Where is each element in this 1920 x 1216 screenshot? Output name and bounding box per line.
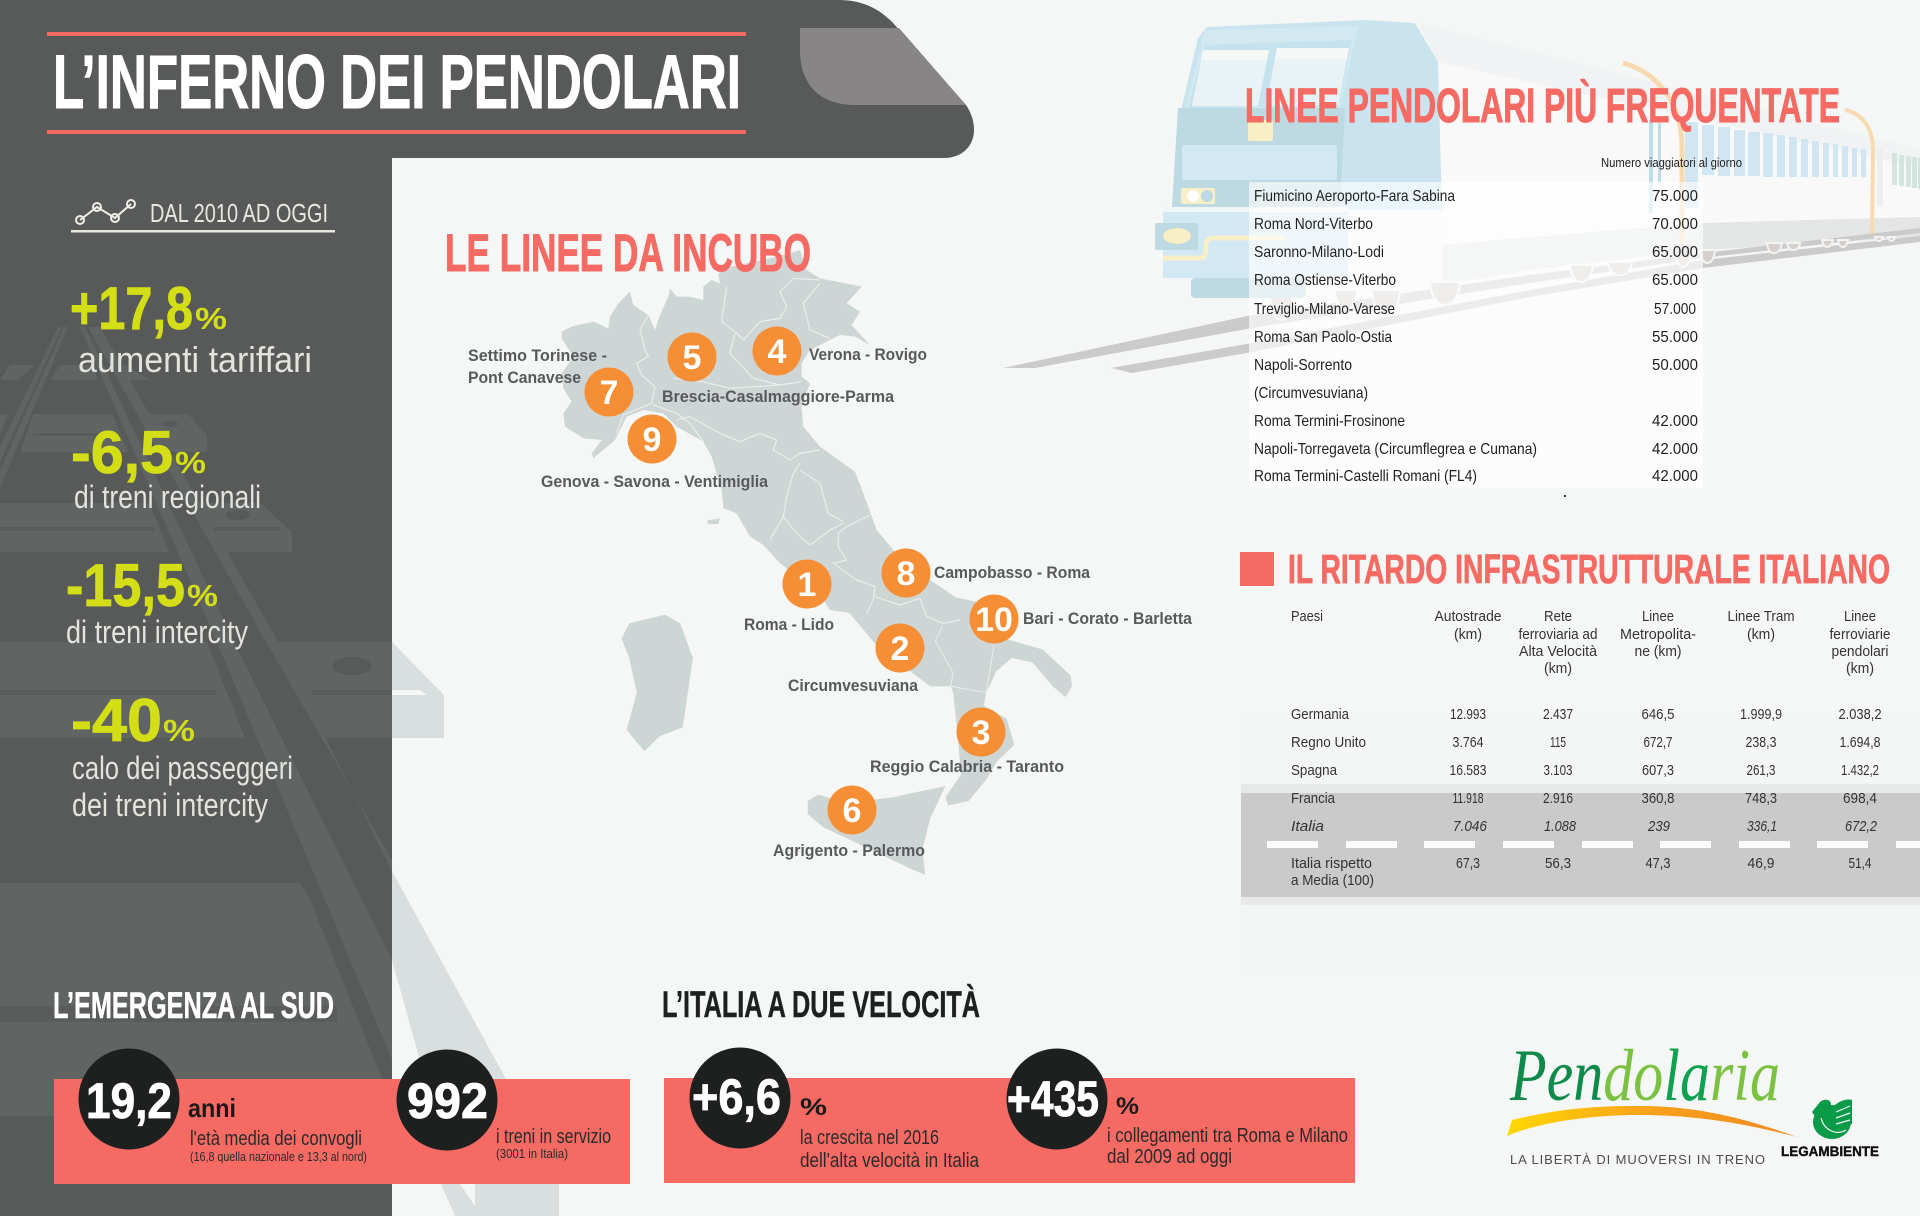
marker 4: Verona - Rovigo	[752, 326, 927, 376]
table: infrastructure comparison: 672,7	[1644, 734, 1672, 751]
table: infrastructure comparison: Linee Tram	[1728, 608, 1794, 625]
stat: treni regionali: -6,5	[71, 419, 173, 486]
table: infrastructure comparison: 261,3	[1746, 762, 1776, 779]
table: infrastructure comparison: 2.038,2	[1838, 706, 1882, 723]
stat: 992 treni: 992	[407, 1073, 488, 1129]
table: infrastructure comparison: Autostrade	[1434, 608, 1502, 625]
table: busiest lines: Roma Termini-Castelli Romani (FL4)	[1254, 468, 1477, 485]
table: busiest lines: Napoli-Sorrento	[1254, 357, 1352, 374]
table: infrastructure comparison: Alta Velocità	[1519, 643, 1598, 660]
table: busiest lines: Roma Termini-Frosinone	[1254, 413, 1405, 430]
stat: calo passeggeri	[71, 687, 293, 823]
table: infrastructure comparison: 46,9	[1748, 855, 1774, 872]
marker 3: Reggio Calabria - Taranto: 3	[972, 714, 990, 752]
marker 7: Settimo Torinese - Pont Canavese: Pont Canavese	[468, 368, 581, 387]
marker 5: Brescia-Casalmaggiore-Parma	[662, 332, 895, 406]
stat: aumenti tariffari: aumenti tariffari	[78, 339, 312, 380]
section label: dal 2010 ad oggi	[71, 198, 335, 232]
marker 2: Circumvesuviana: Circumvesuviana	[788, 676, 918, 695]
table: busiest lines: 42.000	[1652, 468, 1698, 485]
table: infrastructure comparison: (km)	[1544, 660, 1572, 677]
stat: treni regionali: %	[175, 445, 206, 480]
table: infrastructure comparison: ne (km)	[1634, 643, 1682, 660]
stat: aumenti tariffari: +17,8	[70, 275, 193, 342]
table: busiest lines: 42.000	[1652, 413, 1698, 430]
table: infrastructure comparison: 115	[1550, 734, 1566, 751]
header window highlight	[800, 28, 966, 105]
stat: calo passeggeri: dei treni intercity	[72, 787, 268, 823]
table: infrastructure comparison: 12.993	[1450, 706, 1486, 723]
stat: +6,6%: %	[800, 1094, 827, 1121]
table: busiest lines	[1249, 182, 1703, 488]
stat: +6,6%: +6,6	[692, 1069, 781, 1125]
table: infrastructure comparison: 238,3	[1746, 734, 1776, 751]
stat: 992 treni: (3001 in Italia)	[496, 1146, 568, 1161]
table: infrastructure comparison: 56,3	[1545, 855, 1571, 872]
table: infrastructure comparison: (km)	[1454, 626, 1482, 643]
table: busiest lines: 57.000	[1654, 301, 1696, 318]
table: busiest lines: Roma Ostiense-Viterbo	[1254, 272, 1396, 289]
stat: treni regionali: di treni regionali	[74, 479, 261, 515]
table: busiest lines: Saronno-Milano-Lodi	[1254, 244, 1384, 261]
panel: emergenza al sud	[54, 1048, 630, 1184]
table: infrastructure comparison: ferroviaria ad	[1518, 626, 1598, 643]
table: infrastructure comparison: 1.432,2	[1841, 762, 1879, 779]
marker 6: Agrigento - Palermo	[773, 786, 925, 860]
marker 1: Roma - Lido	[744, 560, 834, 634]
table: infrastructure comparison: 360,8	[1642, 790, 1674, 807]
table: infrastructure comparison: Metropolita-	[1620, 626, 1696, 643]
stat: 992 treni: i treni in servizio	[496, 1126, 611, 1148]
stat: +435%: +435	[1007, 1071, 1099, 1127]
table: infrastructure comparison	[1291, 608, 1890, 889]
stat: calo passeggeri: %	[163, 713, 195, 748]
table: infrastructure comparison: 646,5	[1642, 706, 1674, 723]
table: infrastructure comparison: Francia	[1291, 790, 1336, 807]
table: infrastructure comparison: Germania	[1291, 706, 1350, 723]
marker 7: Settimo Torinese - Pont Canavese: Settimo Torinese -	[468, 346, 607, 365]
table: infrastructure comparison: 239	[1647, 818, 1671, 835]
marker 10: Bari - Corato - Barletta: Bari - Corato - Barletta	[1023, 609, 1192, 628]
train rails	[1003, 228, 1920, 373]
table: infrastructure comparison: 1.694,8	[1840, 734, 1880, 751]
table: busiest lines: 42.000	[1652, 441, 1698, 458]
table: infrastructure comparison: 698,4	[1843, 790, 1877, 807]
logo: Legambiente	[1781, 1099, 1879, 1159]
table: infrastructure comparison: 51,4	[1848, 855, 1872, 872]
heading: emergenza al sud: L’EMERGENZA AL SUD	[53, 985, 334, 1026]
table: busiest lines: 65.000	[1652, 244, 1698, 261]
table: infrastructure comparison: Italia	[1291, 818, 1324, 835]
icon: line chart	[76, 200, 135, 224]
logo: Pendolaria	[1507, 1035, 1797, 1167]
table: infrastructure comparison: Rete	[1544, 608, 1572, 625]
marker 5: Brescia-Casalmaggiore-Parma: 5	[683, 339, 701, 377]
table: infrastructure comparison: 336,1	[1747, 818, 1777, 835]
stat: +6,6%: la crescita nel 2016	[800, 1127, 939, 1149]
marker 3: Reggio Calabria - Taranto	[870, 708, 1064, 776]
table: infrastructure comparison: 3.764	[1452, 734, 1484, 751]
stat: 19,2 anni: 19,2	[86, 1073, 172, 1129]
table: infrastructure comparison: 748,3	[1745, 790, 1777, 807]
table: infrastructure comparison: pendolari	[1832, 643, 1888, 660]
stat: treni intercity: %	[187, 578, 218, 613]
table: busiest lines: 75.000	[1652, 188, 1698, 205]
table: busiest lines: Roma San Paolo-Ostia	[1254, 329, 1392, 346]
heading: italia a due velocita: L’ITALIA A DUE VELOCITÀ	[662, 984, 980, 1025]
table: busiest lines: Treviglio-Milano-Varese	[1254, 301, 1395, 318]
table: infrastructure comparison: 1.999,9	[1740, 706, 1782, 723]
marker 5: Brescia-Casalmaggiore-Parma: Brescia-Casalmaggiore-Parma	[662, 387, 895, 406]
table: infrastructure comparison: Linee	[1844, 608, 1876, 625]
stat: aumenti tariffari: %	[195, 301, 227, 336]
table: infrastructure comparison: 2.437	[1543, 706, 1573, 723]
panel: italia a due velocita	[664, 1048, 1355, 1183]
stat: 992 treni	[396, 1050, 611, 1161]
marker 10: Bari - Corato - Barletta: 10	[975, 601, 1013, 639]
left dark panel and header shape	[0, 0, 974, 1216]
table: busiest lines: Fiumicino Aeroporto-Fara Sabina	[1254, 188, 1455, 205]
table: infrastructure comparison: 607,3	[1642, 762, 1674, 779]
train cab	[1172, 20, 1442, 210]
table: infrastructure comparison: ferroviarie	[1830, 626, 1890, 643]
stat: 19,2 anni: l'età media dei convogli	[190, 1128, 362, 1150]
logo: Pendolaria: LA LIBERTÀ DI MUOVERSI IN TRENO	[1510, 1152, 1765, 1167]
marker 6: Agrigento - Palermo: 6	[843, 792, 861, 830]
table: infrastructure comparison: Spagna	[1291, 762, 1338, 779]
table: busiest lines: 50.000	[1652, 357, 1698, 374]
table: busiest lines: (Circumvesuviana)	[1254, 385, 1368, 402]
marker 4: Verona - Rovigo: Verona - Rovigo	[809, 345, 927, 364]
table: infrastructure comparison: 3.103	[1544, 762, 1572, 779]
logo: Pendolaria: Pendolaria	[1509, 1035, 1780, 1117]
marker 8: Campobasso - Roma	[882, 548, 1090, 598]
heading: le linee da incubo: LE LINEE DA INCUBO	[445, 224, 811, 283]
railway track on light background	[392, 642, 559, 1216]
map: south and islands	[622, 554, 1072, 875]
map of Italy	[562, 250, 1072, 875]
marker 9: Genova - Savona - Ventimiglia: Genova - Savona - Ventimiglia	[541, 472, 769, 491]
marker 7: Settimo Torinese - Pont Canavese	[468, 346, 634, 416]
marker 4: Verona - Rovigo: 4	[768, 333, 787, 371]
stat: +435%: %	[1116, 1093, 1139, 1120]
marker 10: Bari - Corato - Barletta	[970, 594, 1192, 644]
table: infrastructure comparison: 2.916	[1543, 790, 1573, 807]
table: busiest lines: 55.000	[1652, 329, 1698, 346]
table: infrastructure comparison: (km)	[1846, 660, 1874, 677]
table: infrastructure comparison: Paesi	[1291, 608, 1323, 625]
stat: 19,2 anni: anni	[188, 1093, 236, 1123]
marker 1: Roma - Lido: 1	[798, 566, 816, 604]
train wheels	[1270, 237, 1895, 320]
stat: +435%	[1006, 1048, 1348, 1168]
table: busiest lines: 65.000	[1652, 272, 1698, 289]
train illustration	[1003, 20, 1920, 373]
table: infrastructure comparison: (km)	[1747, 626, 1775, 643]
marker 7: Settimo Torinese - Pont Canavese: 7	[600, 374, 618, 412]
marker 9: Genova - Savona - Ventimiglia	[541, 414, 769, 491]
marker 1: Roma - Lido: Roma - Lido	[744, 615, 834, 634]
table: infrastructure comparison: 672,2	[1845, 818, 1878, 835]
stat: treni intercity: di treni intercity	[66, 614, 248, 650]
marker 8: Campobasso - Roma: 8	[897, 555, 915, 593]
stat: calo passeggeri: -40	[71, 687, 162, 754]
marker 6: Agrigento - Palermo: Agrigento - Palermo	[773, 841, 925, 860]
stat: 19,2 anni	[78, 1048, 367, 1164]
table: infrastructure comparison: 67,3	[1456, 855, 1480, 872]
stat: treni intercity	[66, 552, 248, 650]
marker 2: Circumvesuviana	[788, 624, 924, 695]
table: infrastructure comparison: 1.088	[1544, 818, 1577, 835]
title: L’INFERNO DEI PENDOLARI	[53, 40, 741, 125]
marker 2: Circumvesuviana: 2	[891, 630, 909, 668]
table: infrastructure comparison: Italia rispetto	[1291, 855, 1372, 872]
marker 3: Reggio Calabria - Taranto: Reggio Calabria - Taranto	[870, 757, 1064, 776]
table: infrastructure comparison: 16.583	[1450, 762, 1486, 779]
section label: dal 2010 ad oggi: DAL 2010 AD OGGI	[150, 198, 328, 228]
stat: treni regionali	[71, 419, 261, 515]
table: busiest lines: Napoli-Torregaveta (Circumflegrea e Cumana)	[1254, 441, 1537, 458]
table: busiest lines: 70.000	[1652, 216, 1698, 233]
marker 9: Genova - Savona - Ventimiglia: 9	[643, 421, 661, 459]
stat: +435%: dal 2009 ad oggi	[1107, 1146, 1232, 1168]
table: infrastructure comparison: a Media (100)	[1291, 872, 1374, 889]
header title block	[47, 32, 746, 134]
logo: Legambiente: LEGAMBIENTE	[1781, 1143, 1879, 1159]
marker 8: Campobasso - Roma: Campobasso - Roma	[934, 563, 1090, 582]
railway track on dark panel	[0, 327, 392, 1116]
stat: aumenti tariffari	[70, 275, 312, 380]
stat: calo passeggeri: calo dei passeggeri	[72, 750, 293, 786]
table: busiest lines: Roma Nord-Viterbo	[1254, 216, 1373, 233]
table: infrastructure comparison: 47,3	[1646, 855, 1670, 872]
stat: treni intercity: -15,5	[66, 552, 185, 619]
icon: swan	[1812, 1099, 1852, 1139]
table: infrastructure comparison: 7.046	[1453, 818, 1488, 835]
table: infrastructure comparison: Regno Unito	[1291, 734, 1366, 751]
table caption: Numero viaggiatori al giorno	[1601, 155, 1742, 170]
stat: +6,6%	[690, 1048, 980, 1172]
panel: infrastructure table background	[1240, 717, 1920, 973]
train carriages	[1418, 23, 1920, 170]
stat: +435%: i collegamenti tra Roma e Milano	[1107, 1125, 1348, 1147]
map: north and centre	[562, 250, 960, 637]
stat: 19,2 anni: (16,8 quella nazionale e 13,3 al nord)	[190, 1149, 367, 1164]
stat: +6,6%: dell'alta velocità in Italia	[800, 1150, 980, 1172]
table: infrastructure comparison: Linee	[1642, 608, 1674, 625]
table: infrastructure comparison: 11.918	[1452, 790, 1484, 807]
